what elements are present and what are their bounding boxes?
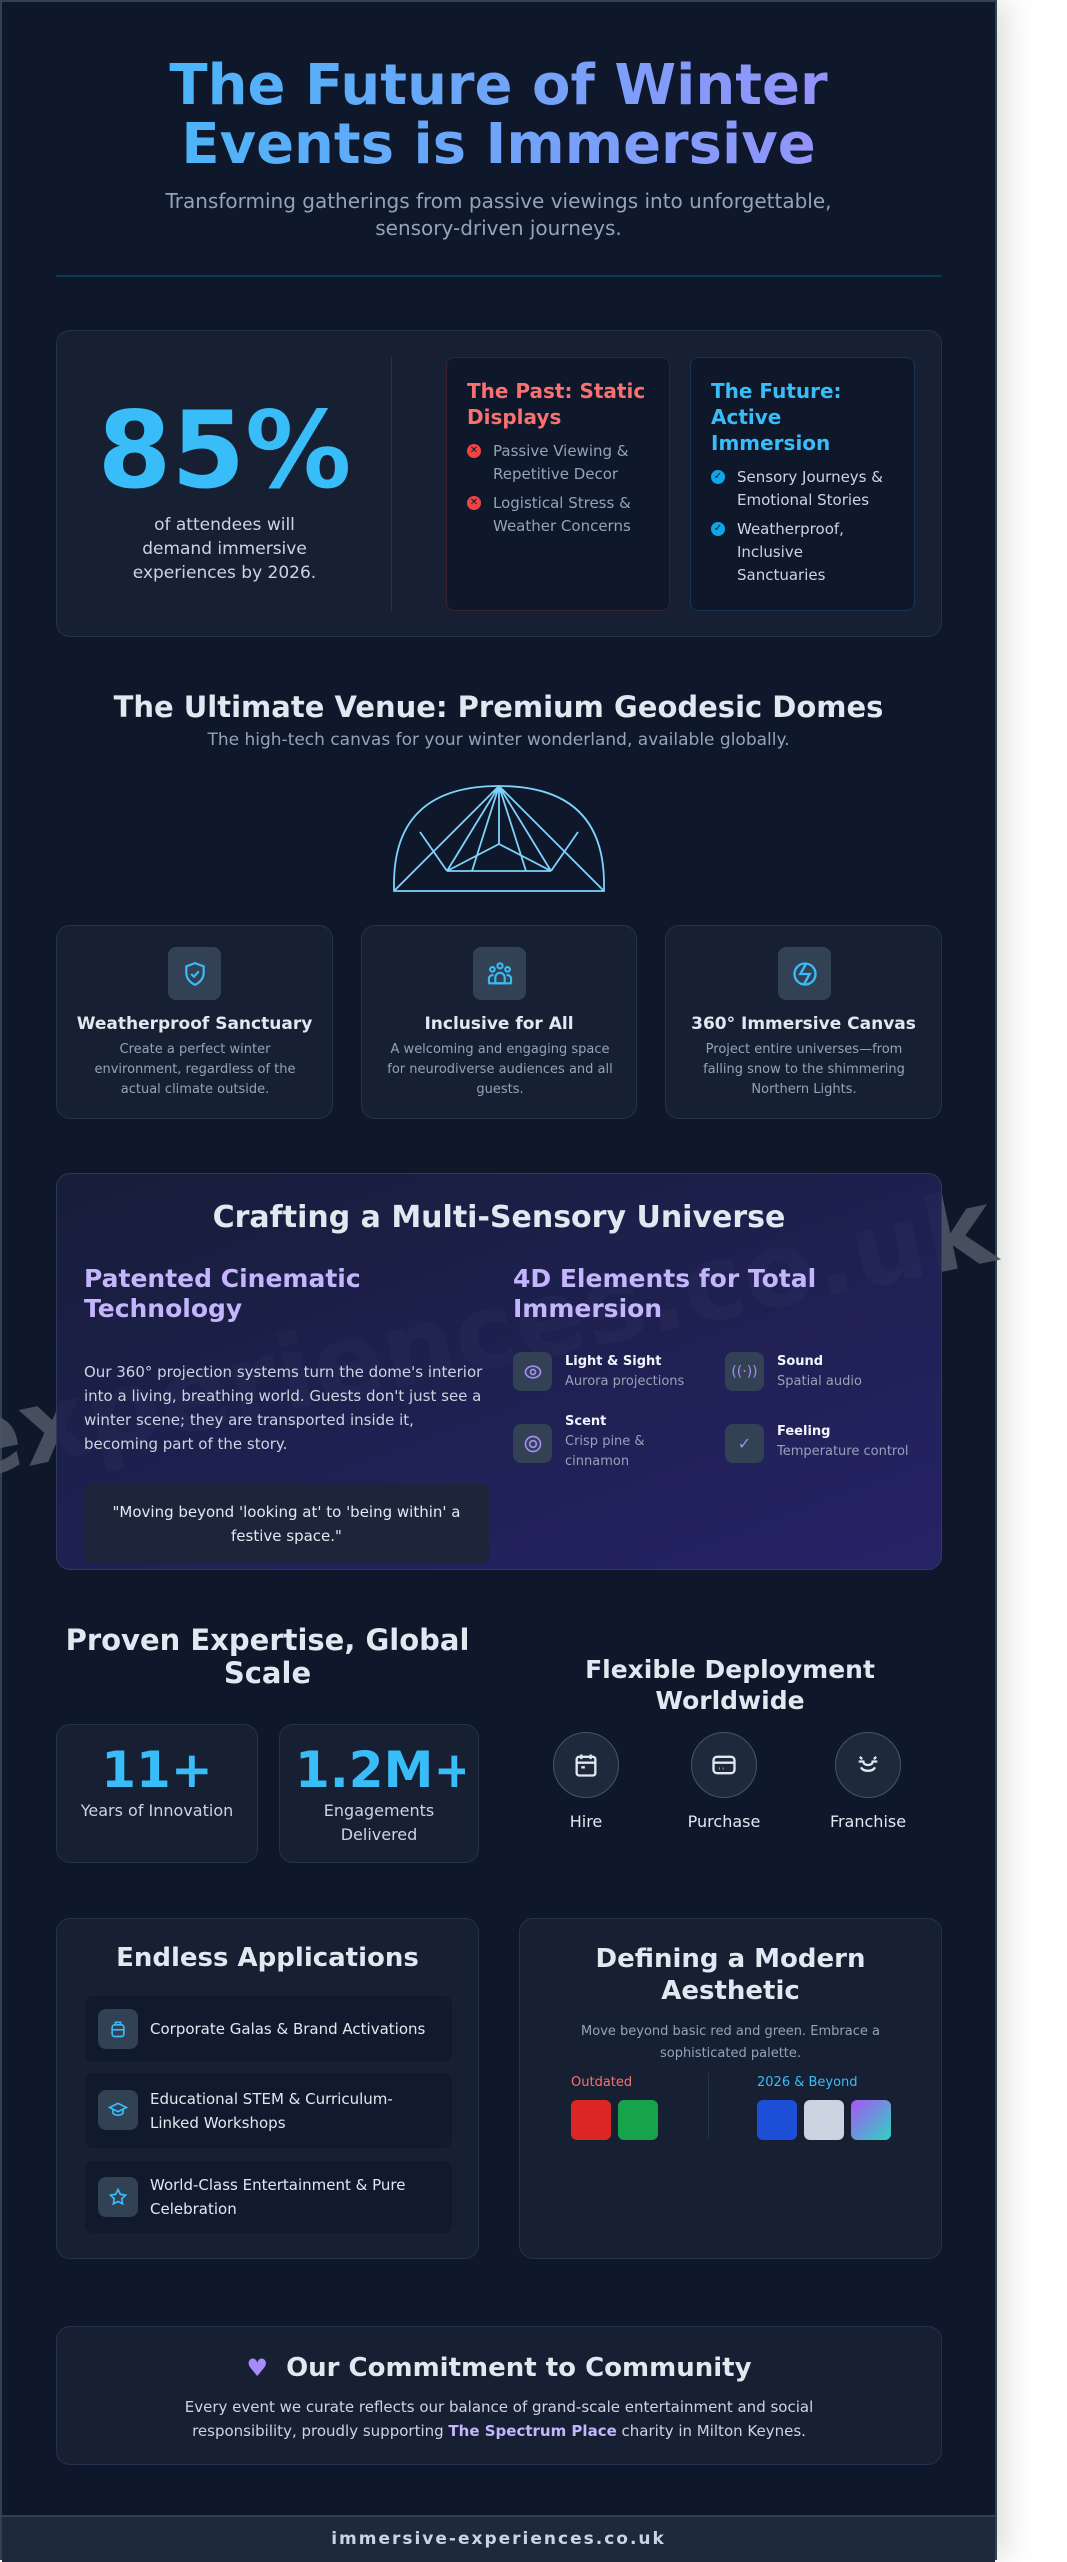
footer: immersive-experiences.co.uk (331, 2529, 666, 2549)
card: the past: ✕ (470, 445, 478, 456)
palette: outdated (571, 2075, 658, 2140)
stat card: 11+: Years of Innovation (81, 1801, 233, 1820)
panel: multi-sensory universe (56, 1173, 942, 1570)
element: feeling: Feeling (777, 1424, 830, 1439)
big stat 85%: 85% (98, 389, 351, 512)
panel: endless applications (56, 1918, 479, 2259)
icon: shield (168, 947, 221, 1000)
element: sound: Sound (777, 1354, 823, 1369)
palette: outdated: Outdated (571, 2075, 632, 2090)
heading: Crafting a Multi-Sensory Universe (213, 1200, 785, 1235)
subtitle: Transforming gatherings from passive viewings into unforgettable, sensory-driven journeys. (166, 189, 832, 240)
left column: cinematic tech (84, 1264, 489, 1564)
stat card: 1.2M+ (279, 1724, 479, 1863)
big stat 85% (98, 389, 351, 583)
card: the future: ✓ (714, 471, 722, 482)
element: light: Aurora projections (565, 1374, 684, 1389)
quote: "Moving beyond 'looking at' to 'being within' a festive space." (113, 1503, 460, 1545)
element: light: Light & Sight (565, 1354, 662, 1369)
stat card: 1.2M+: Engagements Delivered (324, 1801, 434, 1844)
big stat 85%: of attendees will demand immersive experiences by 2026. (133, 515, 316, 583)
option: hire: Hire (570, 1812, 602, 1831)
item: corporate: Corporate Galas & Brand Activations (150, 2020, 425, 2038)
option: franchise: Franchise (830, 1812, 906, 1831)
feature card: inclusive: Inclusive for All (424, 1014, 574, 1034)
element: sound: ((·)) (731, 1364, 758, 1380)
feature card: weatherproof (56, 925, 333, 1119)
heading: flexible deployment: Flexible Deployment Worldwide (585, 1655, 875, 1715)
element: light (513, 1352, 684, 1391)
palette: 2026 and beyond: 2026 & Beyond (757, 2075, 858, 2090)
card: the future: Sensory Journeys & Emotional Stories (737, 468, 883, 509)
item: entertainment: World-Class Entertainment & Pure Celebration (150, 2176, 405, 2218)
element: scent: Crisp pine & cinnamon (565, 1434, 645, 1469)
body text: Every event we curate reflects our balance of grand-scale entertainment and social responsibility, proudly supporting The Spectrum Place charity in Milton Keynes. (185, 2398, 813, 2440)
panel: community commitment (56, 2326, 942, 2465)
right column: 4D elements (513, 1264, 909, 1469)
venue subtitle: The high-tech canvas for your winter wonderland, available globally. (207, 730, 790, 750)
option: franchise (830, 1732, 906, 1831)
card: the past: Logistical Stress & Weather Concerns (493, 494, 631, 535)
palette: 2026 and beyond (757, 2075, 891, 2140)
deployment options (553, 1732, 906, 1831)
stat card: 11+ (56, 1724, 258, 1863)
title (2, 56, 995, 174)
heading: ultimate venue: The Ultimate Venue: Premium Geodesic Domes (114, 690, 883, 724)
element: feeling: Temperature control (777, 1444, 909, 1459)
item: educational: Educational STEM & Curriculum-Linked Workshops (150, 2090, 393, 2132)
heading: proven expertise: Proven Expertise, Global Scale (66, 1623, 469, 1690)
left column: cinematic tech: Our 360° projection systems turn the dome's interior into a living, breathing world. Guests don't just see a winter scene; they are transported inside it, becoming part of the story. (84, 1363, 482, 1453)
feature card: inclusive (361, 925, 637, 1119)
icon: people (473, 947, 526, 1000)
item: entertainment (85, 2161, 452, 2233)
heading: Endless Applications (116, 1943, 419, 1973)
card: the future (690, 357, 915, 611)
element: scent (513, 1414, 645, 1469)
quote (84, 1484, 489, 1564)
right column: 4D elements: 4D Elements for Total Immersion (513, 1264, 816, 1323)
card: the future: Weatherproof, Inclusive Sanctuaries (737, 520, 844, 584)
option: hire (553, 1732, 619, 1831)
element: feeling (725, 1424, 909, 1463)
element: feeling: ✓ (738, 1434, 751, 1453)
icon: geodesic dome (393, 785, 605, 892)
feature card: 360 canvas: Project entire universes—from falling snow to the shimmering Northern Lights. (703, 1042, 905, 1097)
left column: cinematic tech: Patented Cinematic Technology (84, 1264, 361, 1323)
panel: stat and comparison (56, 330, 942, 637)
item: educational (85, 2073, 452, 2148)
element: sound: Spatial audio (777, 1374, 862, 1389)
element: sound (725, 1352, 862, 1391)
card: the past: Passive Viewing & Repetitive Decor (493, 442, 628, 483)
icon: globe (778, 947, 831, 1000)
panel: modern aesthetic (519, 1918, 942, 2259)
title: The Future of Winter Events is Immersive (169, 53, 828, 177)
feature card: 360 canvas: 360° Immersive Canvas (691, 1014, 916, 1034)
feature card: 360 canvas (665, 925, 942, 1119)
heading: Defining a Modern Aesthetic (596, 1944, 866, 2006)
stat card: 11+: 11+ (101, 1741, 213, 1799)
feature card: weatherproof: Create a perfect winter environment, regardless of the actual climate outside. (94, 1042, 296, 1097)
feature card: inclusive: A welcoming and engaging space for neurodiverse audiences and all guests. (387, 1042, 613, 1097)
card: the past: ✕ (470, 497, 478, 508)
description: Move beyond basic red and green. Embrace a sophisticated palette. (581, 2024, 880, 2061)
card: the future: The Future: Active Immersion (711, 379, 842, 455)
card: the future: ✓ (714, 523, 722, 534)
element: scent: Scent (565, 1414, 606, 1429)
footer (2, 2515, 995, 2562)
card: the past (446, 357, 670, 611)
feature card: weatherproof: Weatherproof Sanctuary (77, 1014, 312, 1034)
option: purchase (688, 1732, 760, 1831)
item: corporate (85, 1996, 452, 2062)
heading with heart icon: ♥ Our Commitment to Community (246, 2353, 752, 2383)
card: the past: The Past: Static Displays (467, 379, 645, 429)
option: purchase: Purchase (688, 1812, 760, 1831)
